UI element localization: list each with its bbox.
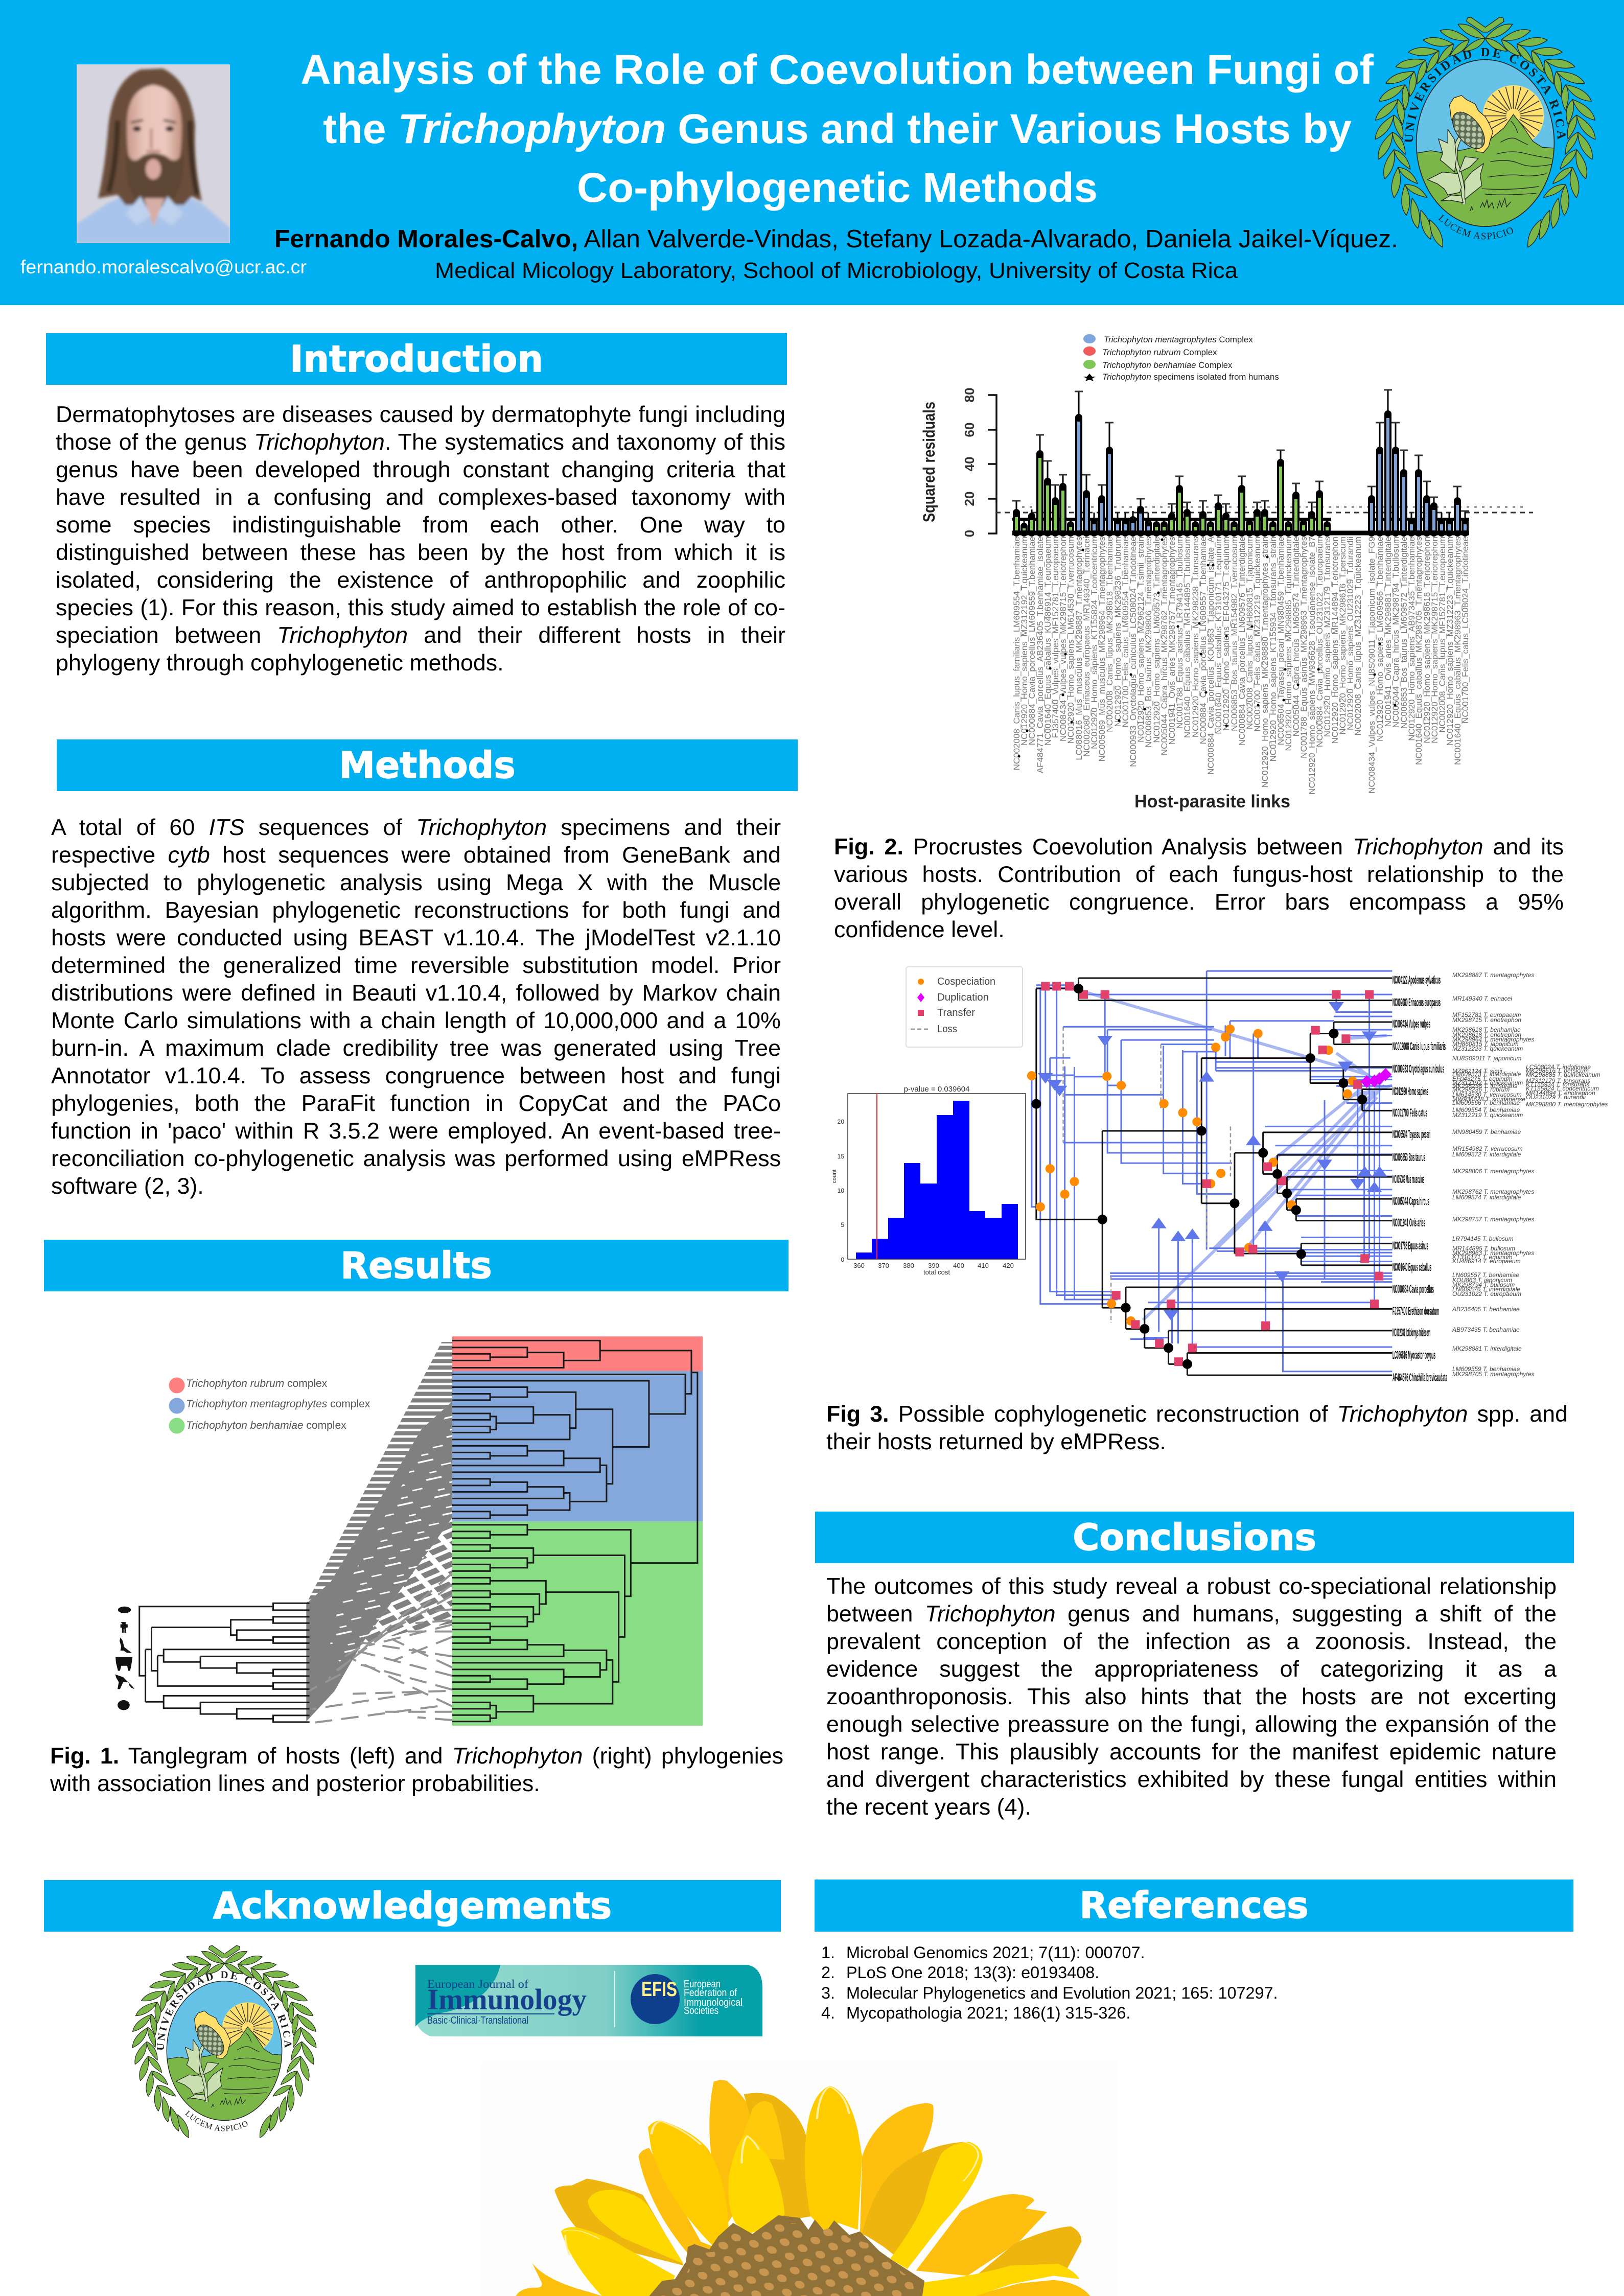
heading: acknowledgements: Acknowledgements — [213, 1885, 612, 1927]
rotated host-parasite link labels: NC012920_Homo_sapiens_MK298618_T.eriotrephon — [1422, 537, 1432, 743]
light blue transfer links — [1083, 991, 1392, 1320]
rotated host-parasite link labels: NC005044_Capra_hircus_MK298762_T.mentagrophytes — [1159, 537, 1169, 755]
rotated host-parasite link labels: FJ357400_Vulpes_vulpes_MF152781_T.europaeum — [1051, 537, 1060, 738]
logo: European Journal of Immunology and EFIS banner — [415, 1965, 762, 2036]
legend: event types: Duplication — [937, 992, 989, 1003]
histogram: total cost p-value: 15 — [838, 1153, 844, 1160]
fungal tip labels: MK298757 T. mentagrophytes — [1452, 1216, 1534, 1223]
rotated host-parasite link labels: NC000884_Cavia_porcellus_LN609576_T.interdigitale — [1237, 537, 1247, 746]
text: conclusions body: prevalent conception of the infection as a zoonosis. Instead, the — [826, 1629, 1557, 1654]
chart: squared residuals bars — [869, 317, 1533, 828]
legend: event types: Loss — [937, 1024, 957, 1035]
rotated host-parasite link labels: NC001640_Equus_caballus_MR144895_T.bullosum — [1182, 537, 1192, 738]
text: methods body: function in 'paco' within R 3.5.2 were employed. An event-based tree- — [51, 1118, 781, 1144]
fungal tip labels: MH860815 T. japonicum — [1452, 1040, 1519, 1048]
fungal tip labels: MK298880 T. mentagrophytes — [1526, 1101, 1608, 1108]
text: introduction body: speciation between Trichophyton and their different hosts in their — [56, 622, 785, 648]
rotated host-parasite link labels: NC012920_Homo_sapiens_MZ312223_T.quickeanum — [1445, 537, 1455, 746]
list: references: PLoS One 2018; 13(3): e0193408. — [846, 1963, 1099, 1982]
rotated host-parasite link labels: NC012920_Homo_sapiens_LM609566_T.benhamiae — [1375, 537, 1385, 741]
rotated host-parasite link labels: NC012920_Homo_sapiens_MZ312179_T.tonsurans — [1323, 537, 1332, 737]
authors: Fernando Morales-Calvo, Allan Valverde-Vindas, Stefany Lozada-Alvarado, Daniela Jaikel-Víquez. — [274, 225, 1398, 253]
rotated host-parasite link labels: NC001700_Felis_catus_MZ312219_T.quickeanum — [1252, 537, 1262, 732]
rotated host-parasite link labels: NC002008_Canis_lupus_MZ312223_T.quickeanum — [1353, 537, 1363, 735]
logo: European Journal of Immunology and EFIS banner: Immunological — [684, 1997, 743, 2008]
fungal tip labels: MR144895 T. bullosum — [1452, 1245, 1515, 1252]
rotated host-parasite link labels: NC012920_Homo_sapiens_KT155824_T.concentricum — [1089, 537, 1099, 749]
histogram: total cost p-value: 400 — [953, 1262, 964, 1269]
chart: cophylogenetic reconstruction and p-value histogram: AF464576 Chinchilla brevicaudata — [1393, 1371, 1447, 1384]
fungal tip labels: MK298618 T. benhamiae — [1452, 1026, 1521, 1033]
icon: host silhouettes — [115, 1607, 134, 1710]
rotated host-parasite link labels: NC012920_Homo_sapiens_MZ312192_T.quickeanum — [1019, 537, 1029, 746]
chart: cophylogenetic reconstruction and p-value histogram: NC002080 Erinaceus europaeus — [1393, 996, 1441, 1009]
fungal tip labels: MK298887 T. mentagrophytes — [1452, 971, 1534, 979]
caption: figure 3: their hosts returned by eMPRess. — [826, 1429, 1166, 1454]
heading: introduction — [46, 333, 787, 385]
chart: cophylogenetic reconstruction and p-value histogram: NC001941 Ovis aries — [1393, 1216, 1425, 1229]
histogram: total cost p-value: 360 — [853, 1262, 865, 1269]
list: references — [815, 1932, 1573, 2024]
chart: cophylogenetic reconstruction and p-value histogram: NC000884 Cavia porcellus — [1393, 1283, 1434, 1295]
panel: acknowledgements — [44, 1880, 781, 2136]
chart: cophylogenetic reconstruction and p-value histogram: NC006853 Bos taurus — [1393, 1151, 1425, 1164]
caption: figure 2: various hosts. Contribution of each fungus-host relationship to the — [834, 862, 1564, 887]
heading: introduction: Introduction — [290, 338, 543, 380]
caption: figure 2: confidence level. — [834, 917, 1005, 942]
histogram: total cost p-value: count — [831, 1170, 838, 1183]
y axis with ticks: Squared residuals — [920, 402, 938, 522]
text: conclusions body: between Trichophyton genus and humans, suggesting a shift of the — [826, 1601, 1557, 1627]
list: references: 4. — [821, 2004, 835, 2022]
text: introduction body: some species indistinguishable from each other. One way to — [56, 512, 785, 538]
rotated host-parasite link labels: AF484771_Cavia_porcellus_AB236405_T.benhamiae_isolate — [1035, 537, 1045, 773]
text: conclusions body: the recent years (4). — [826, 1794, 1031, 1820]
histogram: total cost p-value: 420 — [1003, 1262, 1014, 1269]
host tip labels — [1393, 973, 1447, 1384]
illustration: sunflower — [460, 2054, 1134, 2296]
logo: university seal: LUCEM ASPICIO — [1438, 214, 1513, 239]
text: methods body: reconciliation co-phylogenetic analysis was performed using eMPRess — [51, 1146, 781, 1171]
fungal tip labels: MR149340 T. erinacei — [1452, 995, 1512, 1002]
triangle markers — [1038, 1002, 1387, 1320]
histogram: total cost p-value: 390 — [928, 1262, 939, 1269]
fungal tip labels: LC508024 T. indotineae — [1526, 1063, 1591, 1071]
panel: figure 2 procrustes chart — [828, 317, 1574, 950]
fungal tip labels: KU486914 T. europaeum — [1452, 1258, 1521, 1265]
heading: acknowledgements — [44, 1880, 781, 1932]
fungal tip labels: MZ312219 T. quickeanum — [1452, 1111, 1523, 1119]
y axis with ticks: 0 — [962, 530, 977, 537]
rotated host-parasite link labels: NC002008_Canis_lupus_MF152781_T.europaeum — [1437, 537, 1447, 733]
rotated host-parasite link labels: LC088016_Mus_musculus_MK298887_T.mentagrophytes — [1074, 537, 1084, 760]
rotated host-parasite link labels: NC012920_Homo_sapiens_LM609573_T.interdigitale — [1152, 537, 1162, 743]
chart: cophylogenetic reconstruction and p-value histogram: NC005044 Capra hircus — [1393, 1195, 1429, 1208]
chart: cophylogenetic reconstruction and p-value histogram: NC012920 Homo sapiens — [1393, 1085, 1428, 1098]
fungal tip labels: MK298964 T. mentagrophytes — [1452, 1036, 1534, 1043]
histogram: total cost p-value: 380 — [903, 1262, 914, 1269]
text: introduction body: Dermatophytoses are diseases caused by dermatophyte fungi including — [56, 402, 785, 427]
rotated host-parasite link labels: NC000884_Cavia_porcellus_KOU863_T.japonicum_isolate_A — [1206, 536, 1216, 775]
rotated host-parasite link labels: NC000884_Cavia_porcellus_OU231022_T.europaeum — [1315, 537, 1325, 747]
list: references: Microbal Genomics 2021; 7(11): 000707. — [846, 1943, 1145, 1962]
legend: species complexes — [169, 1378, 370, 1434]
fungal tip labels: MK298705 T. mentagrophytes — [1452, 1371, 1534, 1378]
title: the Trichophyton Genus and their Various Hosts by — [323, 106, 1352, 152]
rotated host-parasite link labels: NC001788_Equus_asinus_MK298963_T.mentagrophytes — [1299, 537, 1309, 758]
caption: figure 1 — [50, 1742, 783, 1797]
heading: methods: Methods — [339, 744, 516, 786]
caption: figure 2 — [834, 833, 1564, 943]
rotated host-parasite link labels: NC012920_Homo_sapiens_MR144894_T.eriotrephon — [1330, 537, 1340, 744]
caption: figure 1: Fig. 1. Tanglegram of hosts (left) and Trichophyton (right) phylogenies — [50, 1743, 783, 1769]
rotated host-parasite link labels: NC001640_Equus_caballus_MK298705_T.mentagrophytes — [1414, 537, 1424, 765]
logo: university seal: UNIVERSIDAD DE COSTA RICA — [1404, 48, 1566, 142]
heading: methods — [57, 739, 798, 791]
y axis with ticks — [920, 388, 996, 537]
photo: presenter portrait — [77, 64, 230, 243]
text: methods body: Annotator v1.10.4. To assess congruence between host and fungi — [51, 1063, 781, 1088]
affiliation: Medical Micology Laboratory, School of Microbiology, University of Costa Rica — [435, 258, 1238, 283]
rotated host-parasite link labels: NC001640_Equus_caballus_KU486914_T.europaeum — [1043, 537, 1053, 746]
list: references: 1. — [821, 1943, 835, 1962]
list: references: 2. — [821, 1963, 835, 1982]
rotated host-parasite link labels: NC000933_Oryctolagus_cuniculus_LC508024_T.indotineae — [1128, 537, 1138, 767]
caption: figure 1: with association lines and posterior probabilities. — [50, 1771, 540, 1796]
bars with error whiskers — [995, 390, 1533, 533]
text: methods body: burn-in. A maximum clade credibility tree was generated using Tree — [51, 1035, 781, 1061]
fungal tip labels: MF152781 T. europaeum — [1452, 1011, 1521, 1018]
logo: European Journal of Immunology and EFIS banner: Basic·Clinical·Translational — [427, 2015, 528, 2026]
contact email: fernando.moralescalvo@ucr.ac.cr — [20, 257, 307, 277]
fungal tip labels: LM609559 T. benhamiae — [1452, 1365, 1520, 1373]
chart: cophylogenetic reconstruction and p-value histogram: LC086816 Myocastor coypus — [1393, 1349, 1435, 1361]
text: introduction body: genus have been developed through constant changing criteria that — [56, 457, 785, 482]
chart: cophylogenetic reconstruction and p-value histogram: NC005089 Mus musculus — [1393, 1173, 1424, 1186]
text: conclusions body: The outcomes of this study reveal a robust co-speciational relationship — [826, 1573, 1557, 1599]
colored clade backgrounds — [452, 1336, 703, 1726]
heading: references: References — [1079, 1884, 1309, 1927]
histogram: total cost p-value: total cost — [923, 1268, 950, 1276]
left phylogeny: hosts — [140, 1603, 310, 1722]
heading: conclusions — [815, 1512, 1574, 1563]
title: Analysis of the Role of Coevolution between Fungi of — [300, 47, 1374, 93]
y axis with ticks: 60 — [962, 423, 977, 437]
title: Co-phylogenetic Methods — [577, 165, 1098, 211]
text: methods body: respective cytb host sequences were obtained from GeneBank and — [51, 842, 781, 868]
text: introduction body: species (1). For this reason, this study aimed to establish the role of co- — [56, 595, 785, 620]
fungal tip labels: MK298794 T. bullosum — [1452, 1281, 1515, 1288]
fungal tip labels: LM609573 T. interdigitale — [1452, 1071, 1521, 1078]
chart: cophylogenetic reconstruction and p-value histogram: NC002008 Canis lupus familiaris — [1393, 1040, 1446, 1053]
text: conclusions body — [826, 1572, 1557, 1821]
logo: university seal — [1375, 16, 1595, 247]
blue host-switch lines — [1032, 971, 1392, 1372]
legend: species complexes: Trichophyton mentagrophytes complex — [186, 1398, 370, 1410]
panel: results — [44, 1240, 788, 1802]
rotated host-parasite link labels: NC012920_Homo_sapiens_AB973435_T.benhamiae — [1407, 537, 1417, 741]
rotated host-parasite link labels: NC012920_Homo_sapiens_MK298885_T.quinckeanum — [1284, 537, 1293, 751]
rotated host-parasite link labels: NC012920_Homo_sapiens_EF043275_T.equinum — [1221, 537, 1231, 731]
fungal tip labels: KT155824 T. concentricum — [1526, 1085, 1599, 1092]
fungal tip labels: OU231022 T. europaeum — [1452, 1290, 1521, 1297]
histogram: total cost p-value — [831, 1085, 1026, 1276]
fungal tip labels: MK298236 T. rubrum — [1452, 1086, 1510, 1093]
fungal tip labels: LM609574 T. interdigitale — [1452, 1194, 1521, 1201]
text: introduction body: isolated, considering the existence of anthropophilic and zoophilic — [56, 567, 785, 593]
chart: cophylogenetic reconstruction and p-value histogram: NC004122 Apodemus sylvaticus — [1393, 973, 1441, 986]
histogram: total cost p-value: 0 — [841, 1256, 844, 1263]
list: references: Mycopathologia 2021; 186(1) 315-326. — [846, 2004, 1130, 2022]
legend: event types: Cospeciation — [937, 976, 995, 987]
rotated host-parasite link labels — [1012, 536, 1470, 795]
logo: university seal: UNIVERSIDAD DE COSTA RICA — [157, 1972, 291, 2050]
rotated host-parasite link labels: NC012920_Homo_sapiens_MZ962124_T.simii_strain — [1136, 537, 1146, 743]
legend: species complexes: Trichophyton benhamiae complex — [186, 1420, 346, 1431]
chart: cophylogenetic reconstruction and p-value histogram: FJ357400 Erethizon dorsatum — [1393, 1305, 1439, 1317]
legend: complexes: Trichophyton rubrum Complex — [1102, 347, 1217, 357]
fungal tip labels: MK298806 T. mentagrophytes — [1452, 1168, 1534, 1175]
fungal tip labels: EF043275 T. equinum — [1452, 1075, 1513, 1082]
duplication markers — [1361, 1068, 1391, 1088]
chart: cophylogenetic reconstruction and p-value histogram: NC002081 Ictidomys tridecem — [1393, 1326, 1430, 1339]
text: conclusions body: enough selective preassure on the fungi, allowing the expansión of the — [826, 1711, 1557, 1737]
caption: figure 3 — [826, 1400, 1568, 1455]
panel: conclusions — [815, 1512, 1574, 1839]
fungal tip labels: NU8S09011 T. japonicum — [1452, 1055, 1521, 1062]
logo: European Journal of Immunology and EFIS banner: European Journal of — [427, 1978, 528, 1990]
fungal tip labels: MK298715 T. eriotrephon — [1452, 1016, 1521, 1024]
logo: university seal — [132, 1940, 317, 2136]
logo: European Journal of Immunology and EFIS banner: European — [684, 1979, 721, 1990]
text: introduction body: distinguished between these has been by the host from which it is — [56, 540, 785, 565]
fungal tip labels: MR154982 T. verrucosum — [1452, 1145, 1523, 1152]
caption: figure 3: Fig 3. Possible cophylogenetic reconstruction of Trichophyton spp. and — [826, 1401, 1568, 1427]
caption: figure 2: overall phylogenetic congruence. Error bars encompass a 95% — [834, 889, 1564, 915]
text: introduction body: have resulted in a confusing and complexes-based taxonomy with — [56, 484, 785, 510]
text: introduction body: those of the genus Trichophyton. The systematics and taxonomy of this — [56, 429, 785, 455]
text: methods body: determined the generalized time reversible substitution model. Prior — [51, 953, 781, 978]
text: methods body: Monte Carlo simulations with a chain length of 10,000,000 and a 10% — [51, 1008, 781, 1033]
logo: European Journal of Immunology and EFIS banner: Societies — [684, 2005, 718, 2016]
fungal tip labels: LM614530 T. verrucosum — [1452, 1091, 1522, 1098]
chart: cophylogenetic reconstruction and p-value histogram: NC001788 Equus asinus — [1393, 1239, 1428, 1252]
panel: references — [815, 1880, 1573, 2033]
heading: references — [815, 1880, 1573, 1932]
rotated host-parasite link labels: NC001941_Ovis_aries_MK298757_T.mentagrophytes — [1167, 537, 1177, 745]
panel: figure 3 eMPRess reconstruction — [818, 950, 1615, 1467]
histogram: total cost p-value: 5 — [841, 1221, 844, 1228]
y axis with ticks: 20 — [962, 492, 977, 506]
chart: cophylogenetic reconstruction and p-value histogram: NC008434 Vulpes vulpes — [1393, 1017, 1430, 1030]
text: methods body: hosts were conducted using BEAST v1.10.4. The jModelTest v2.1.10 — [51, 925, 781, 950]
histogram: total cost p-value: 20 — [838, 1118, 844, 1125]
text: methods body: software (2, 3). — [51, 1173, 204, 1199]
fungal tip labels: OU231029 T. durandii — [1526, 1094, 1586, 1101]
fungal tip labels: MR144894 T. eriotrephon — [1526, 1089, 1595, 1097]
histogram: total cost p-value: 410 — [978, 1262, 989, 1269]
fungal tip labels: MK298762 T. mentagrophytes — [1452, 1188, 1534, 1195]
host phylogeny in black — [1036, 978, 1392, 1375]
text: methods body: subjected to phylogenetic analysis using Mega X with the Muscle — [51, 870, 781, 895]
rotated host-parasite link labels: NC012920_Homo_sapiens_MW936628_T.soudanense_isolate_B7 — [1307, 537, 1317, 795]
fungal tip labels: MK298963 T. mentagrophytes — [1452, 1249, 1534, 1257]
rotated host-parasite link labels: NC005044_Capra_hircus_LM609574_T.interdigitale — [1291, 537, 1301, 736]
fungal tip labels: AB973435 T. benhamiae — [1452, 1326, 1520, 1333]
rotated host-parasite link labels: NC008434_Vulpes_vulpes_MK298715_T.eriotrephon — [1058, 537, 1068, 741]
heading: results — [44, 1240, 788, 1291]
fungal tip labels: MN980459 T. benhamiae — [1452, 1128, 1521, 1135]
fungal tip labels: LN609557 T. benhamiae — [1452, 1271, 1519, 1279]
text: conclusions body: zooanthroponosis. This also hints that the hosts are not excerting — [826, 1684, 1557, 1709]
rotated host-parasite link labels: NC001788_Equus_asinus_LR794145_T.bullosum — [1175, 537, 1185, 729]
panel: methods — [51, 739, 798, 1222]
legend: event types — [906, 967, 1023, 1047]
rotated host-parasite link labels: NC006853_Bos_taurus_MR154982_T.verrucosum — [1229, 537, 1239, 731]
text: methods body — [51, 814, 781, 1200]
fungal tip labels: MK298881 T. interdigitale — [1452, 1345, 1522, 1352]
rotated host-parasite link labels: NC002080_Erinaceus_europaeus_MR149340_T.erinacei — [1082, 537, 1092, 757]
rotated host-parasite link labels: NC005089_Mus_musculus_MK298964_T.mentagrophytes — [1097, 537, 1107, 761]
logo: university seal: LUCEM ASPICIO — [185, 2111, 247, 2131]
text: methods body: distributions were defined in Beauti v1.10.4, followed by Markov chain — [51, 980, 781, 1006]
fungal tip labels: LM609566 T. benhamiae — [1452, 1099, 1520, 1106]
rotated host-parasite link labels: NC005044_Capra_hircus_MK298794_T.bullosum — [1391, 537, 1401, 728]
text: conclusions body: evidence suggest the appropriateness of categorizing it as a — [826, 1656, 1557, 1682]
caption: figure 2: Fig. 2. Procrustes Coevolution Analysis between Trichophyton and its — [834, 834, 1564, 860]
fungal tip labels: KT310171 T. equinum — [1452, 1254, 1513, 1261]
fungal tip labels: LN609576 T. interdigitale — [1452, 1286, 1520, 1293]
chart: cophylogenetic reconstruction and p-value histogram: NC000933 Oryctolagus cuniculus — [1393, 1062, 1444, 1075]
legend: event types: Transfer — [937, 1007, 975, 1018]
rotated host-parasite link labels: NC012920_Homo_sapiens_KT155934_T.tonsurans_strain — [1268, 537, 1278, 761]
loss dashes — [1063, 1027, 1231, 1323]
fungal tip labels: LM609554 T. benhamiae — [1452, 1106, 1520, 1114]
chart: cophylogenetic reconstruction and p-value histogram: NC001700 Felis catus — [1393, 1106, 1427, 1119]
rotated host-parasite link labels: NC001640_Equus_caballus_MK298963_T.mentagrophytes — [1453, 537, 1463, 765]
rotated host-parasite link labels: NC012920_Homo_sapiens_LM614530_T.verrucosum — [1066, 537, 1076, 744]
text: conclusions body: and divergent characteristics exhibited by these fungal entities within — [826, 1767, 1557, 1792]
text: methods body: A total of 60 ITS sequences of Trichophyton specimens and their — [51, 815, 781, 840]
title — [300, 47, 1374, 211]
rotated host-parasite link labels: NC001700_Felis_catus_LC508024_T.indotineae — [1460, 537, 1470, 724]
legend: species complexes: Trichophyton rubrum complex — [186, 1378, 328, 1389]
histogram: total cost p-value: 10 — [838, 1187, 844, 1194]
legend: complexes: Trichophyton benhamiae Complex — [1102, 360, 1233, 370]
rotated host-parasite link labels: NC012920_Homo_sapiens_MK298616_T.persicum — [1338, 537, 1348, 734]
rotated host-parasite link labels: NC012920_Homo_sapiens_MK298238_T.tonsurans — [1191, 537, 1200, 737]
right phylogeny: Trichophyton — [452, 1340, 698, 1722]
panel: header banner — [0, 0, 1624, 305]
speciation nodes — [1036, 989, 1362, 1364]
heading: conclusions: Conclusions — [1073, 1516, 1316, 1559]
fungal tip labels: MK298618 T. eriotrephon — [1452, 1031, 1521, 1038]
panel: introduction — [46, 333, 787, 676]
fungal tip labels: MZ312223 T. quickeanum — [1452, 1045, 1523, 1052]
rotated host-parasite link labels: NC002008_Canis_lupus_familiaris_LM609554_T.benhamiae — [1012, 537, 1022, 770]
fungal tip labels: MZ312179 T. tonsurans — [1526, 1077, 1590, 1084]
transfer markers — [1046, 986, 1379, 1362]
heading: results: Results — [340, 1244, 492, 1287]
rotated host-parasite link labels: NC012920_Homo_sapiens_MK298715_T.eriotrephon — [1430, 537, 1440, 743]
fungal tip labels: LM609572 T. interdigitale — [1452, 1151, 1521, 1158]
rotated host-parasite link labels: NC012920_Homo_sapiens_MK298236_T.rubrum — [1113, 537, 1123, 727]
rotated host-parasite link labels: NC006853_Bos_taurus_LM609572_T.interdigitale — [1399, 537, 1409, 729]
logo: European Journal of Immunology and EFIS banner: Immunology — [427, 1983, 587, 2016]
rotated host-parasite link labels: NC012920_Homo_sapiens_OU231029_T.durandii — [1345, 537, 1355, 730]
text: methods body: phylogenies, both the ParaFit function in CopyCat and the PACo — [51, 1091, 781, 1116]
y axis with ticks: 80 — [962, 388, 977, 402]
list: references: Molecular Phylogenetics and Evolution 2021; 165: 107297. — [846, 1984, 1278, 2002]
fungal tip labels: AB236405 T. benhamiae — [1452, 1306, 1520, 1313]
axis title: host-parasite links: Host-parasite links — [1134, 792, 1290, 811]
cospeciation markers — [1032, 1029, 1353, 1321]
histogram: total cost p-value: 370 — [878, 1262, 889, 1269]
rotated host-parasite link labels: NC000884_Cavia_porcellus_LM609559_T.benhamiae — [1027, 537, 1037, 745]
histogram: total cost p-value: p-value = 0.039604 — [904, 1085, 969, 1094]
logo: European Journal of Immunology and EFIS banner: Federation of — [684, 1987, 737, 1999]
text: introduction body — [56, 401, 785, 677]
chart: figure 1 tanglegram — [102, 1318, 736, 1753]
fungal tip labels: KT155934 T. tonsurans — [1526, 1081, 1589, 1088]
rotated host-parasite link labels: NC001941_Ovis_aries_MK298881_T.interdigitale — [1383, 537, 1393, 727]
rotated host-parasite link labels: NC002008_Canis_lupus_MH860815_T.japonicum — [1245, 537, 1255, 729]
rotated host-parasite link labels: NC008434_Vulpes_vulpes_NU8S09011_T.japonicum_isolate_FG9 — [1367, 537, 1377, 794]
rotated host-parasite link labels: NC006853_Bos_taurus_MK298806_T.mentagrophytes — [1144, 537, 1153, 748]
legend: complexes: Trichophyton mentagrophytes Complex — [1104, 335, 1253, 344]
fungal tip labels: MW936628 T. soudanense — [1452, 1096, 1525, 1103]
fungal tip labels: MK298616 T. persicum — [1526, 1067, 1589, 1074]
rotated host-parasite link labels: NC001640_Equus_caballus_KT310171_T.equinum — [1214, 537, 1223, 734]
rotated host-parasite link labels: NC006504_Tayassu_pecari_MN980459_T.benhamiae — [1276, 537, 1286, 745]
rotated host-parasite link labels: NC002008_Canis_lupus_MK298618_T.benhamiae — [1105, 537, 1115, 732]
legend: complexes: Trichophyton specimens isolated from humans — [1102, 372, 1279, 382]
fungal tip labels: MZ312192 T. quickeanum — [1452, 1079, 1523, 1086]
fungal tip labels: MK298885 T. quinckeanum — [1526, 1071, 1600, 1078]
fungal tip labels: MK298238 T. tonsurans — [1452, 1082, 1517, 1089]
rotated host-parasite link labels: NC000884_Cavia_porcellus_LN609557_T.benhamiae — [1198, 537, 1208, 744]
logo: European Journal of Immunology and EFIS banner: EFIS — [641, 1978, 677, 2001]
text: introduction body: phylogeny through cophylogenetic methods. — [56, 650, 504, 676]
fungal tip labels: LR794145 T. bullosum — [1452, 1235, 1514, 1242]
y axis with ticks: 40 — [962, 457, 977, 471]
fungal tip labels — [1452, 971, 1608, 1378]
chart: cophylogenetic reconstruction and p-value histogram: NC001640 Equus caballus — [1393, 1261, 1431, 1273]
chart: cophylogenetic reconstruction and p-value histogram — [818, 950, 1615, 1410]
rotated host-parasite link labels: NC012920_Homo_sapiens_MK298880_T.mentagrophytes_strain — [1260, 537, 1270, 787]
text: conclusions body: host range. This plausibly accounts for the manifest epidemic nature — [826, 1739, 1557, 1765]
fungal tip labels: MZ962124 T. simii — [1452, 1068, 1502, 1075]
text: methods body: algorithm. Bayesian phylogenetic reconstructions for both fungi and — [51, 897, 781, 923]
fungal tip labels: KOU863 T. japonicum — [1452, 1277, 1512, 1284]
legend: complexes — [1083, 334, 1279, 382]
rotated host-parasite link labels: NC001700_Felis_catus_LM609554_T.benhamiae — [1121, 537, 1130, 727]
association lines between hosts and fungi — [306, 1342, 452, 1723]
chart: cophylogenetic reconstruction and p-value histogram: NC006504 Tayassu pecari — [1393, 1128, 1430, 1141]
list: references: 3. — [821, 1984, 835, 2002]
